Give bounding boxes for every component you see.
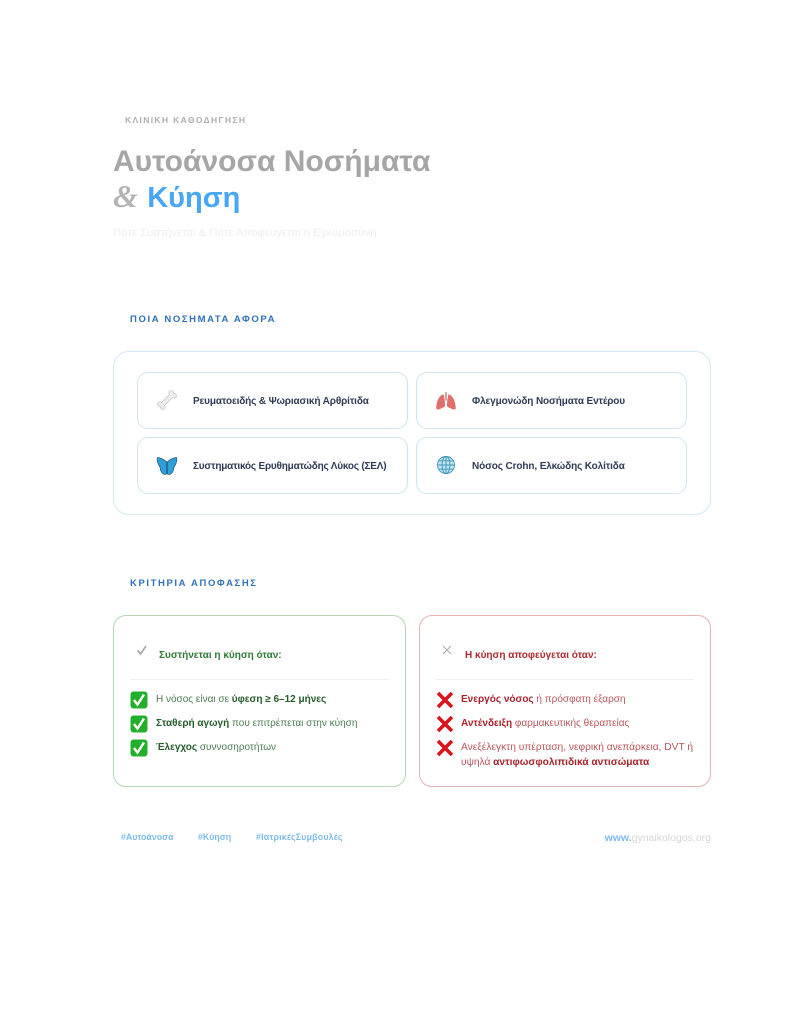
text: Ενεργός νόσος ή πρόσφατη έξαρση — [461, 694, 626, 705]
text: Έλεγχος συννοσηροτήτων — [156, 742, 276, 753]
label: Νόσος Crohn, Ελκώδης Κολίτιδα — [472, 461, 625, 472]
panel heading: Η κύηση αποφεύγεται όταν: — [465, 650, 597, 661]
icon: red cross — [436, 692, 454, 708]
text: Η νόσος είναι σε ύφεση ≥ 6–12 μήνες — [156, 694, 326, 705]
divider — [130, 679, 389, 680]
list item 1 — [436, 692, 626, 708]
icon: grey cross — [442, 646, 452, 654]
hashtags: #Αυτοάνοσα — [121, 832, 174, 842]
icon: butterfly — [156, 457, 178, 475]
icon: green check box — [130, 716, 148, 732]
eyebrow label: ΚΛΙΝΙΚΗ ΚΑΘΟΔΗΓΗΣΗ — [125, 115, 246, 125]
subtitle: Πότε Συστήνεται & Πότε Αποφεύγεται η Εγκυμοσύνη — [113, 227, 377, 239]
panel: recommended — [113, 615, 406, 787]
card: bowel — [416, 372, 687, 429]
panel: conditions — [113, 351, 711, 515]
title: & Κύηση — [113, 178, 240, 214]
list item 2 — [130, 716, 357, 732]
divider — [436, 679, 694, 680]
heading: decision criteria: ΚΡΙΤΗΡΙΑ ΑΠΟΦΑΣΗΣ — [130, 578, 258, 589]
label: Συστηματικός Ερυθηματώδης Λύκος (ΣΕΛ) — [193, 461, 386, 472]
text: Ανεξέλεγκτη υπέρταση, νεφρική ανεπάρκεια, DVT ή — [461, 742, 693, 753]
panel heading: Συστήνεται η κύηση όταν: — [159, 650, 282, 661]
card: lupus — [137, 437, 408, 494]
text: Σταθερή αγωγή που επιτρέπεται στην κύηση — [156, 718, 357, 729]
icon: globe — [437, 456, 455, 474]
panel: avoided — [419, 615, 711, 787]
icon: lungs — [436, 392, 456, 410]
label: Φλεγμονώδη Νοσήματα Εντέρου — [472, 396, 625, 407]
card: crohn — [416, 437, 687, 494]
text: υψηλά αντιφωσφολιπιδικά αντισώματα — [461, 757, 649, 768]
icon: green check box — [130, 740, 148, 756]
title — [113, 145, 430, 214]
icon: green check box — [130, 692, 148, 708]
icon: red cross — [436, 716, 454, 732]
hashtags — [121, 832, 343, 842]
website: www.gynaikologos.org — [605, 832, 711, 844]
icon: grey check — [136, 646, 147, 656]
card: arthritis — [137, 372, 408, 429]
list item 3 — [436, 740, 693, 768]
text: Αντένδειξη φαρμακευτικής θεραπείας — [461, 718, 629, 729]
hashtags: #Κύηση — [198, 832, 231, 842]
text — [461, 742, 693, 768]
list item 2 — [436, 716, 629, 732]
hashtags: #ΙατρικέςΣυμβουλές — [256, 832, 343, 842]
title: Αυτοάνοσα Νοσήματα — [113, 145, 430, 178]
list item 1 — [130, 692, 326, 708]
icon: red cross — [436, 740, 454, 756]
heading: conditions: ΠΟΙΑ ΝΟΣΗΜΑΤΑ ΑΦΟΡΑ — [130, 314, 276, 325]
label: Ρευματοειδής & Ψωριασική Αρθρίτιδα — [193, 396, 369, 407]
list item 3 — [130, 740, 276, 756]
icon: bone — [157, 390, 177, 410]
